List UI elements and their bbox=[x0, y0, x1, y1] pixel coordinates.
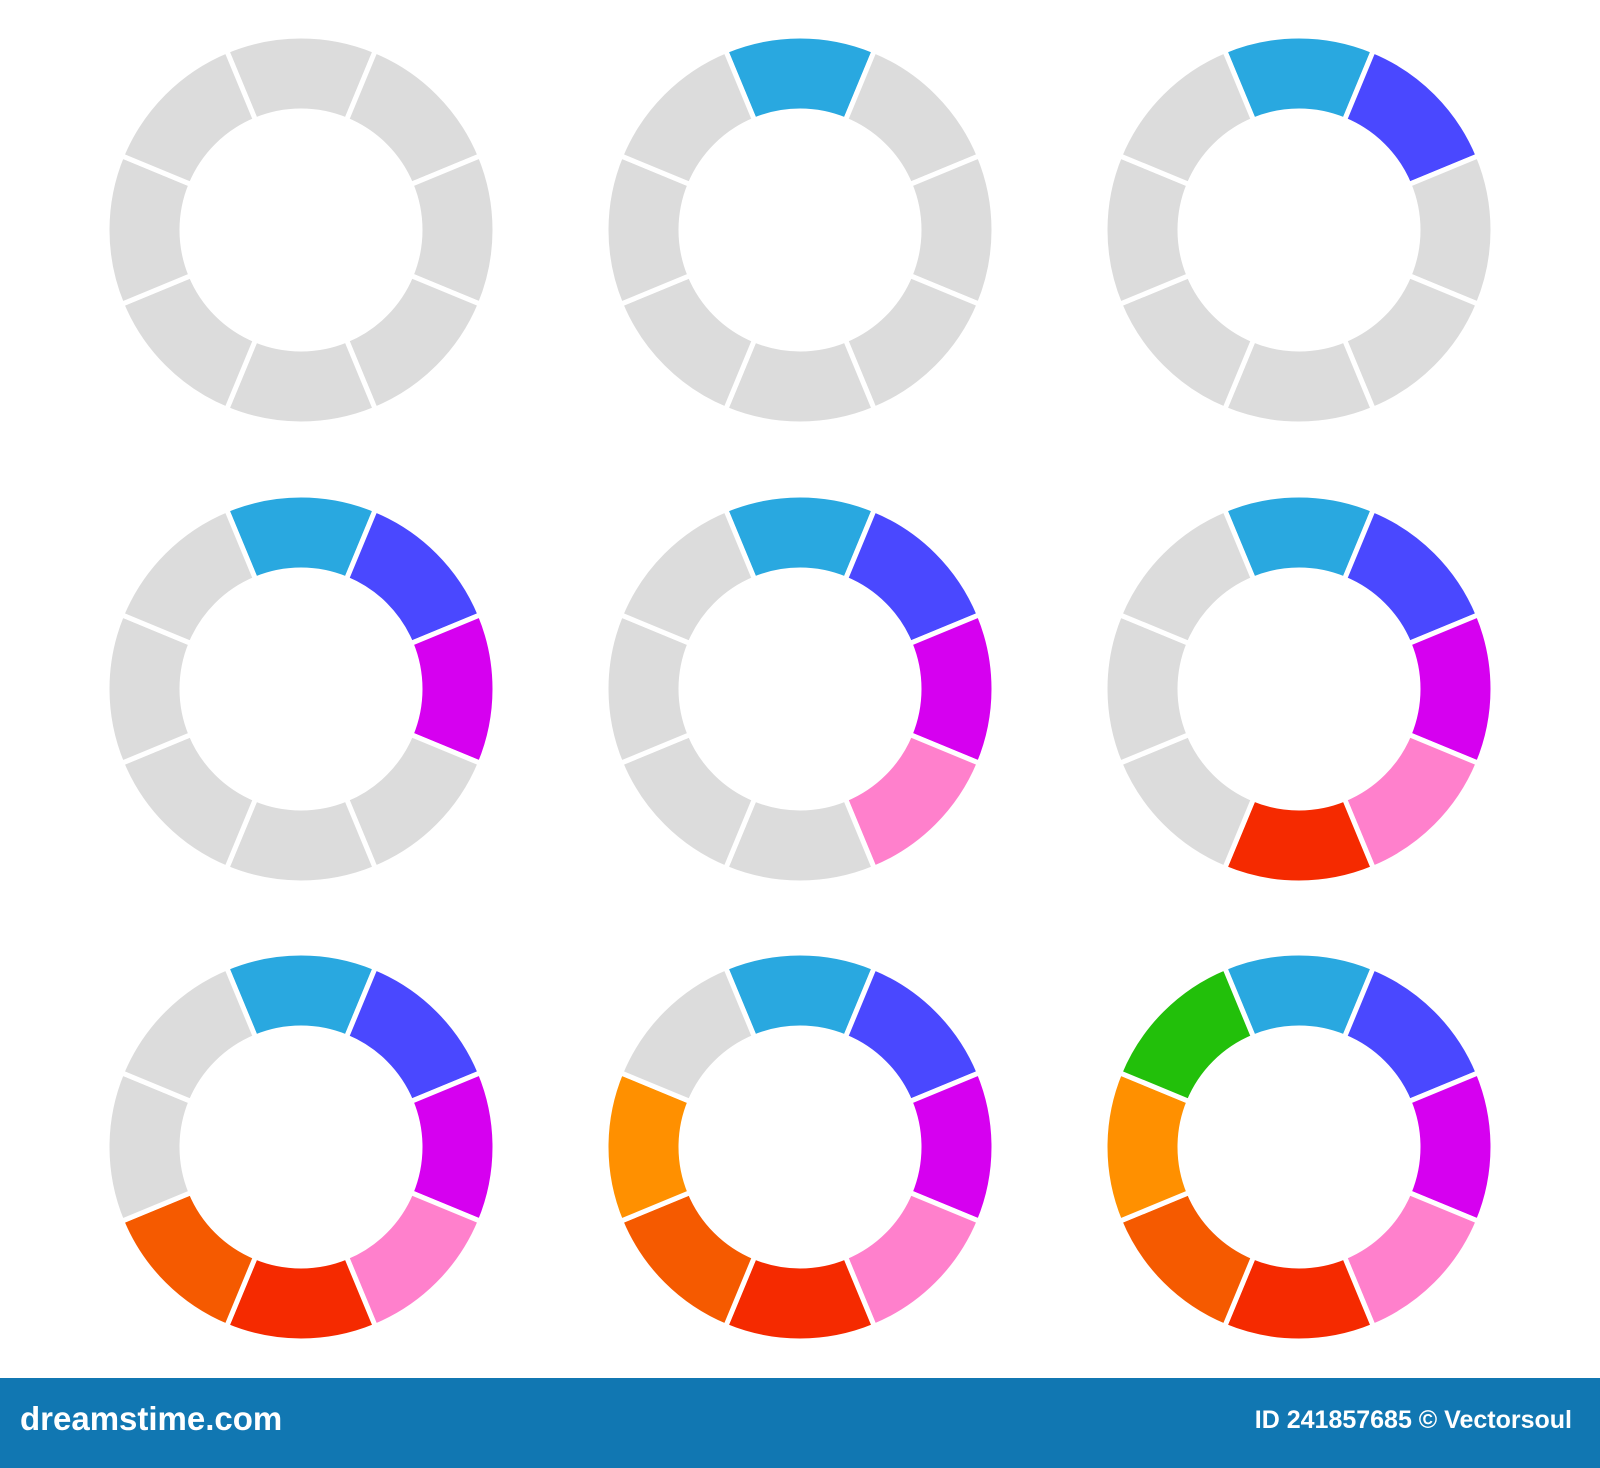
footer banner bbox=[0, 1378, 1600, 1468]
ring 8: seven segments bbox=[606, 953, 994, 1341]
ring 9: all eight segments bbox=[1105, 953, 1493, 1341]
logo text: dreamstime.com bbox=[20, 1400, 282, 1437]
ring 2: one segment bbox=[606, 36, 994, 424]
ring 6: five segments bbox=[1105, 495, 1493, 883]
ring 3: two segments bbox=[1105, 36, 1493, 424]
image id credit: ID 241857685 © Vectorsoul bbox=[1255, 1406, 1572, 1434]
ring 1: all gray bbox=[107, 36, 495, 424]
ring 4: three segments bbox=[107, 495, 495, 883]
ring 5: four segments bbox=[606, 495, 994, 883]
ring 7: six segments bbox=[107, 953, 495, 1341]
